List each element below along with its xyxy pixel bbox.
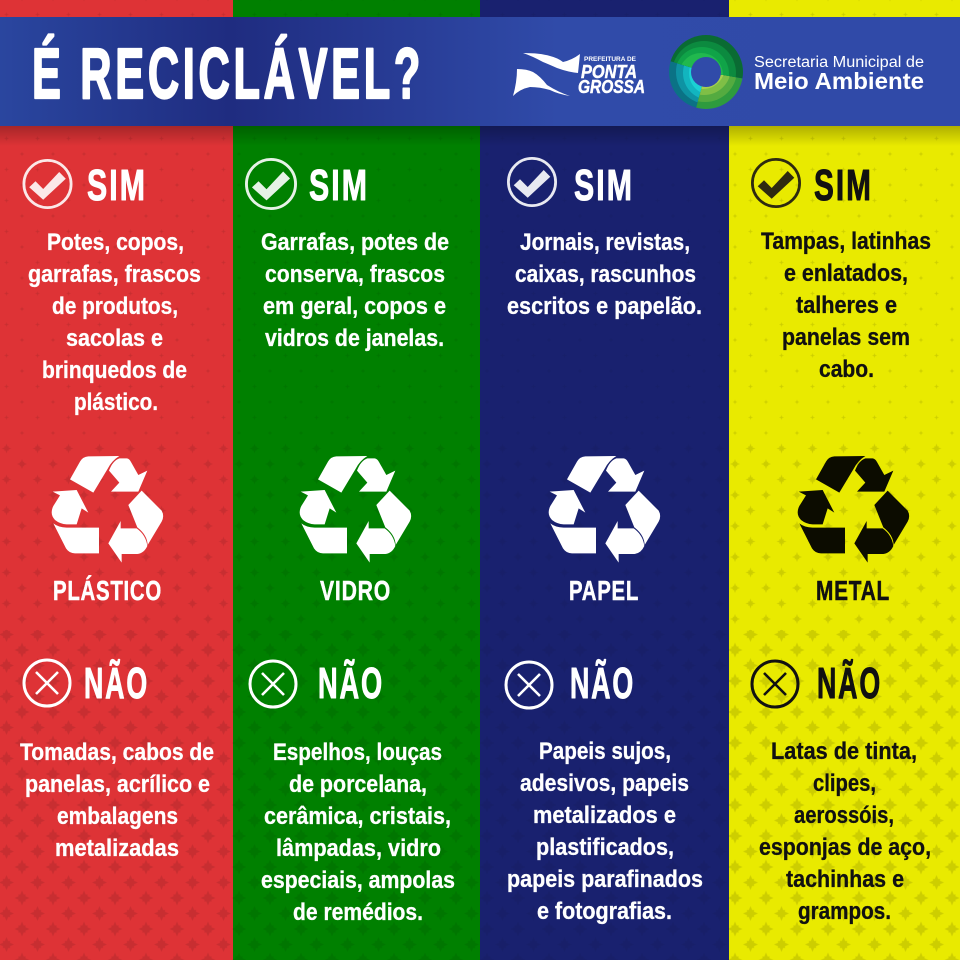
text: plástico não: Tomadas, cabos de xyxy=(20,739,214,766)
heading: SIM: SIM xyxy=(87,161,147,210)
logo: Prefeitura de Ponta Grossa: PREFEITURA DE xyxy=(584,57,636,63)
icon: check xyxy=(752,159,800,207)
text: papel não xyxy=(507,738,703,925)
text: papel não: plastificados, xyxy=(536,834,674,861)
text: metal não: clipes, xyxy=(813,770,876,797)
text: papel sim: Jornais, revistas, xyxy=(520,229,690,256)
text: metal sim: panelas sem xyxy=(782,324,910,351)
label: VIDRO: VIDRO xyxy=(320,575,391,606)
header banner xyxy=(0,17,960,126)
icon: cross xyxy=(506,662,552,708)
logo: Prefeitura de Ponta Grossa: GROSSA xyxy=(578,77,645,97)
panel: papel xyxy=(480,0,729,960)
text: vidro não: cerâmica, cristais, xyxy=(264,803,451,830)
text: plástico sim: garrafas, frascos xyxy=(28,261,201,288)
title: É RECICLÁVEL? xyxy=(32,35,424,114)
text: plástico sim: sacolas e xyxy=(66,325,163,352)
text: plástico não xyxy=(20,739,214,862)
text: metal não xyxy=(759,738,931,925)
icon: cross xyxy=(250,661,296,707)
text: plástico sim: brinquedos de xyxy=(42,357,187,384)
logo text: Secretaria Municipal de Meio Ambiente: Secretaria Municipal de xyxy=(754,54,924,71)
text: papel não: Papeis sujos, xyxy=(539,738,671,765)
text: metal sim xyxy=(761,228,931,383)
icon: recycling symbol xyxy=(300,456,411,563)
text: plástico sim xyxy=(28,229,201,416)
icon: check xyxy=(246,159,296,209)
icon: recycling symbol xyxy=(549,456,660,563)
text: plástico não: embalagens xyxy=(57,803,178,830)
text: plástico sim: de produtos, xyxy=(52,293,178,320)
text: papel sim: caixas, rascunhos xyxy=(515,261,696,288)
text: vidro sim: Garrafas, potes de xyxy=(261,229,449,256)
heading: SIM: SIM xyxy=(574,161,634,210)
label: METAL: METAL xyxy=(816,575,890,606)
label: PAPEL: PAPEL xyxy=(569,575,639,606)
panel: vidro xyxy=(233,0,480,960)
text: vidro não: de porcelana, xyxy=(289,771,427,798)
text: vidro sim: em geral, copos e xyxy=(263,293,446,320)
icon: recycling symbol xyxy=(52,456,163,563)
text: vidro não: lâmpadas, vidro xyxy=(276,835,441,862)
text: metal não: Latas de tinta, xyxy=(771,738,917,765)
text: vidro sim xyxy=(261,229,449,352)
panel: plástico xyxy=(0,0,233,960)
logo text: Secretaria Municipal de Meio Ambiente: Meio Ambiente xyxy=(754,68,924,94)
logo: Prefeitura de Ponta Grossa xyxy=(513,53,645,97)
heading: NÃO: NÃO xyxy=(84,658,149,708)
text: metal não: tachinhas e xyxy=(786,866,904,893)
text: metal sim: Tampas, latinhas xyxy=(761,228,931,255)
text: papel não: papeis parafinados xyxy=(507,866,703,893)
icon: check xyxy=(24,160,71,208)
text: vidro sim: vidros de janelas. xyxy=(265,325,444,352)
logo text: Secretaria Municipal de Meio Ambiente xyxy=(754,54,924,94)
text: vidro não: Espelhos, louças xyxy=(273,739,442,766)
logo: swirl xyxy=(669,35,743,109)
text: metal sim: cabo. xyxy=(819,356,874,383)
text: plástico não: panelas, acrílico e xyxy=(25,771,210,798)
text: metal sim: talheres e xyxy=(796,292,897,319)
text: vidro não xyxy=(261,739,455,926)
text: plástico sim: Potes, copos, xyxy=(47,229,184,256)
heading: SIM: SIM xyxy=(814,161,873,210)
label: PLÁSTICO: PLÁSTICO xyxy=(53,575,162,606)
text: papel não: adesivos, papeis xyxy=(520,770,689,797)
text: metal não: grampos. xyxy=(798,898,891,925)
text: papel sim: escritos e papelão. xyxy=(507,293,702,320)
icon: recycling symbol xyxy=(798,456,909,563)
text: vidro não: especiais, ampolas xyxy=(261,867,455,894)
text: metal sim: e enlatados, xyxy=(784,260,908,287)
text: papel não: e fotografias. xyxy=(537,898,672,925)
heading: NÃO: NÃO xyxy=(318,658,384,708)
heading: NÃO: NÃO xyxy=(570,658,635,708)
text: metal não: esponjas de aço, xyxy=(759,834,931,861)
text: papel sim xyxy=(507,229,702,320)
text: papel não: metalizados e xyxy=(533,802,676,829)
icon: cross xyxy=(24,660,70,706)
text: vidro não: de remédios. xyxy=(293,899,423,926)
logo: Prefeitura de Ponta Grossa: PONTA xyxy=(581,62,637,82)
icon: cross xyxy=(752,661,798,707)
text: plástico sim: plástico. xyxy=(74,389,158,416)
heading: NÃO: NÃO xyxy=(817,658,882,708)
panel: metal xyxy=(729,0,960,960)
text: metal não: aerossóis, xyxy=(794,802,894,829)
text: vidro sim: conserva, frascos xyxy=(265,261,445,288)
text: plástico não: metalizadas xyxy=(55,835,179,862)
heading: SIM: SIM xyxy=(309,161,369,210)
icon: check xyxy=(508,158,556,206)
